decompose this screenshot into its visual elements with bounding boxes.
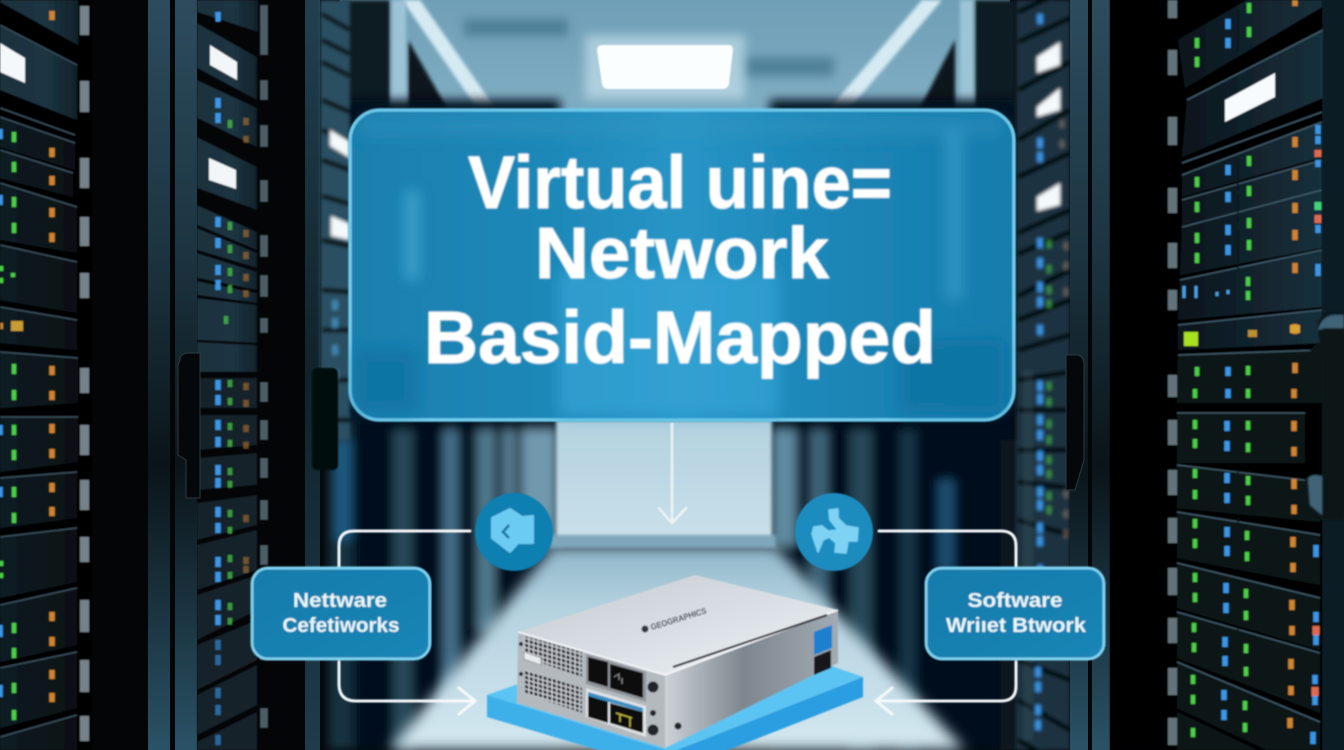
title text: Network [535,214,830,294]
left info box: Nettware [293,590,387,612]
title text: Basid-Mapped [424,296,936,379]
status LEDs [215,12,221,625]
vents [524,636,582,713]
left info box: Cefetiworks [282,615,400,637]
title text: Virtual uine= [468,141,892,224]
right info box [926,568,1104,659]
status LEDs [1038,14,1040,730]
left outer server rack [0,0,92,750]
status LEDs [0,11,52,720]
icon: left circular badge [475,493,553,571]
right info box: Software [968,590,1062,612]
server brand [640,605,708,635]
connector: right box to icon and server [876,531,1016,714]
right edge door handle [1305,313,1344,520]
white displays [1037,42,1060,211]
server chassis [517,575,838,748]
silver latch [524,652,541,665]
rack units [197,0,258,372]
rack handles [260,5,268,728]
status LEDs [1184,0,1318,744]
server on platform [487,575,863,750]
white display [0,43,25,83]
right info box: Wriıet Btwork [946,615,1087,637]
left door post [148,0,320,750]
blurred racks right [770,100,1016,750]
title text [424,141,936,379]
corridor floor [390,546,965,750]
white display [1225,73,1275,122]
rack units [1177,0,1323,750]
port screens [586,654,646,737]
second left server rack [197,0,268,750]
blue platform [487,620,863,750]
corridor ceiling [340,0,1015,130]
central title panel [350,110,1014,420]
right rack door handle [1066,355,1084,490]
blurred third left rack [320,0,350,440]
back wall [556,420,772,545]
connector: left box to icon and server [339,531,475,714]
buttons [519,642,682,736]
soft reflections inside panel [356,115,1004,416]
rack handles [1168,0,1177,745]
blurred racks left [328,100,560,750]
right door post [1070,0,1344,750]
right inner server rack [1000,0,1070,750]
server brand: GEOGRAPHICS [649,605,708,632]
icon: right circular badge [795,493,873,571]
left rack door handle [178,353,200,498]
left info box [252,568,430,659]
white displays [209,45,237,189]
side panels [814,625,832,655]
second left handle [312,368,338,470]
rack handles [80,6,89,741]
rack units [0,0,78,750]
ceiling light [585,35,745,99]
arrow: panel down to server [658,423,687,523]
